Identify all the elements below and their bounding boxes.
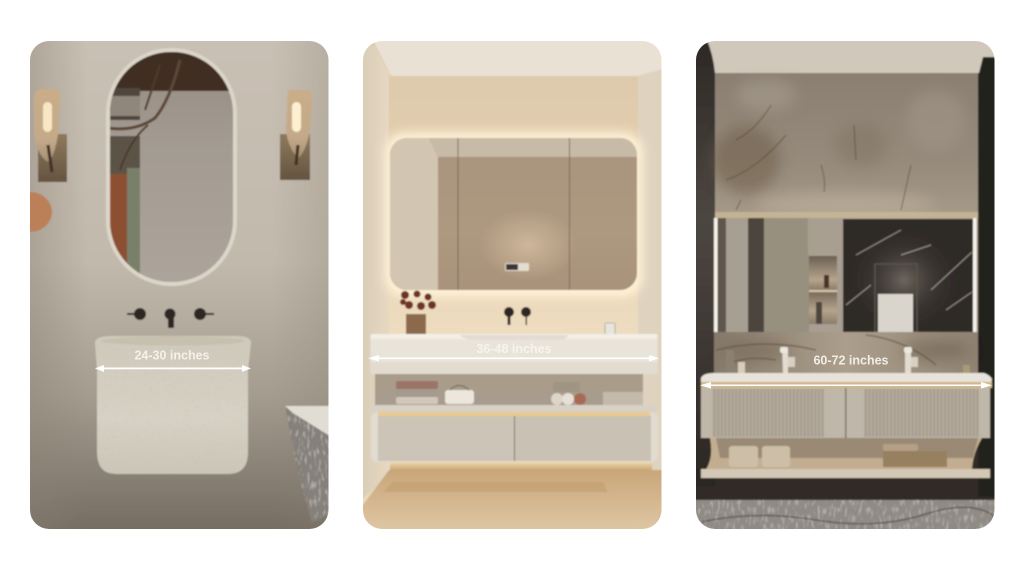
left dark wall bbox=[696, 106, 715, 384]
wall faucet set bbox=[127, 308, 214, 328]
wide mirror bbox=[715, 218, 978, 332]
icon: right wall sconce bbox=[280, 90, 312, 180]
light line above mirror bbox=[715, 212, 978, 218]
mirror LED strips bbox=[714, 218, 976, 332]
label: 36-48 inches: 36-48 inches bbox=[476, 342, 552, 356]
fluted cabinet bbox=[701, 388, 990, 438]
right dark wall bbox=[978, 58, 994, 496]
width arrow bbox=[700, 382, 992, 389]
back wall bbox=[363, 42, 639, 506]
label: 24-30 inches: 24-30 inches bbox=[134, 348, 210, 362]
wall faucet bbox=[504, 307, 531, 325]
towels and storage box bbox=[396, 381, 586, 405]
mirror glow bbox=[385, 132, 643, 297]
marble floor bbox=[692, 500, 999, 534]
ceiling bbox=[706, 41, 994, 74]
panel: small vanity 24-30 inches bbox=[8, 36, 333, 534]
upper marble slab bbox=[712, 73, 978, 218]
dark background bbox=[696, 446, 994, 501]
marble backsplash bbox=[714, 332, 978, 376]
width arrow bbox=[95, 365, 251, 372]
open shelf recess bbox=[375, 374, 643, 396]
round stone sink bbox=[95, 336, 251, 474]
panel: medium vanity 36-48 inches bbox=[359, 36, 666, 534]
LED mirror cabinet bbox=[390, 138, 637, 290]
bathtub corner bbox=[285, 406, 333, 522]
towels and basket bbox=[729, 444, 947, 467]
dried flower decoration bbox=[30, 192, 52, 232]
oval mirror bbox=[106, 48, 237, 286]
drawer unit bbox=[371, 412, 658, 462]
panel: large double vanity 60-72 inches bbox=[692, 36, 999, 534]
lower floating shelf bbox=[701, 469, 990, 478]
infographic: three vanity size photos bbox=[30, 41, 994, 529]
width arrow bbox=[368, 355, 659, 362]
flower vase bbox=[400, 290, 436, 336]
side walls bbox=[363, 45, 390, 498]
open niche under cabinet bbox=[704, 438, 982, 472]
lower shelf slab bbox=[372, 404, 639, 412]
small clock bbox=[605, 323, 615, 335]
icon: left wall sconce bbox=[34, 89, 67, 182]
ceiling bbox=[374, 41, 662, 76]
led strip under counter bbox=[701, 382, 992, 388]
label: 60-72 inches: 60-72 inches bbox=[813, 354, 889, 368]
white countertop bbox=[700, 372, 994, 383]
floor bbox=[359, 470, 666, 534]
basin countertop bbox=[370, 334, 658, 374]
under-cabinet glow bbox=[390, 462, 652, 470]
faucets and bottles bbox=[726, 347, 970, 374]
wall background bbox=[26, 36, 333, 534]
